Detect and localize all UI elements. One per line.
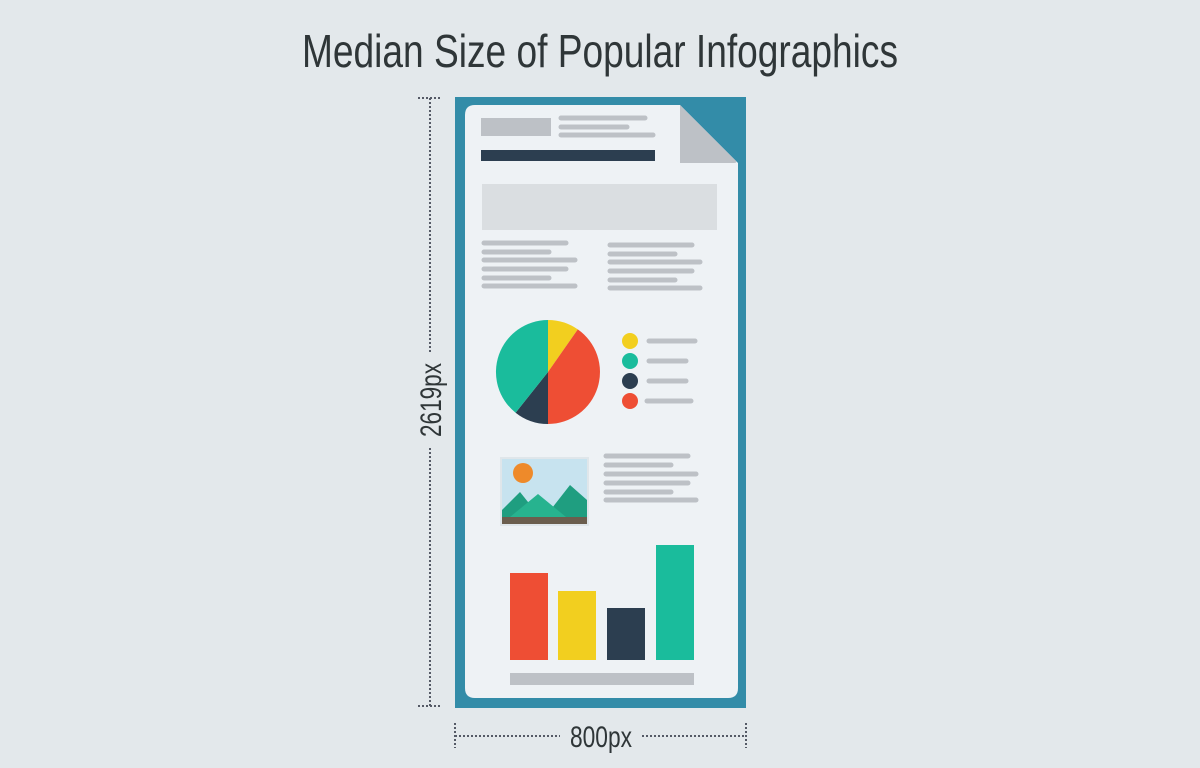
banner box — [482, 184, 717, 230]
bar chart — [510, 545, 694, 685]
text columns — [484, 243, 700, 288]
panel: document frame — [455, 97, 746, 708]
legend — [622, 333, 695, 409]
paper — [465, 105, 738, 698]
dimension: height: 2619px — [415, 363, 448, 437]
text lines beside image — [606, 456, 696, 500]
pie chart — [496, 320, 600, 424]
header block — [481, 118, 655, 161]
icon: landscape image — [500, 457, 589, 526]
icon: page fold — [680, 105, 736, 163]
title: Median Size of Popular Infographics — [302, 25, 898, 77]
dimension: width: 800px — [570, 721, 632, 754]
